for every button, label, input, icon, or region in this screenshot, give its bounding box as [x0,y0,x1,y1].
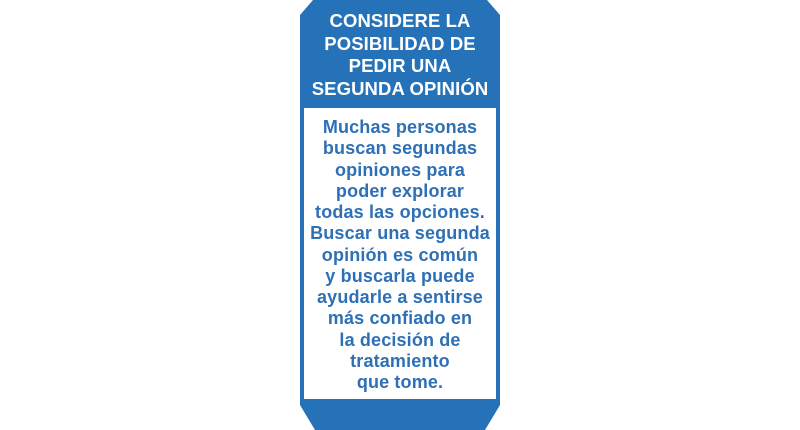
body text: y buscarla puede [325,266,475,286]
title: CONSIDERE LA [330,10,470,31]
panel: text box [304,108,496,399]
body text: Buscar una segunda [310,223,490,243]
card background [300,0,500,430]
body text: opiniones para [335,160,465,180]
body text: poder explorar [336,181,464,201]
title: SEGUNDA OPINIÓN [312,78,488,98]
title: PEDIR UNA [349,55,451,76]
body text: opinión es común [322,244,478,264]
body text: que tome. [357,372,443,392]
body text: todas las opciones. [315,202,485,222]
title: POSIBILIDAD DE [324,32,476,54]
body text: buscan segundas [323,138,477,158]
body text: Muchas personas [323,117,477,137]
body text: la decisión de [339,330,461,350]
body text: ayudarle a sentirse [317,287,483,307]
title [312,10,488,98]
body text: más confiado en [328,308,472,328]
body text [310,117,490,392]
body text: tratamiento [350,351,450,371]
